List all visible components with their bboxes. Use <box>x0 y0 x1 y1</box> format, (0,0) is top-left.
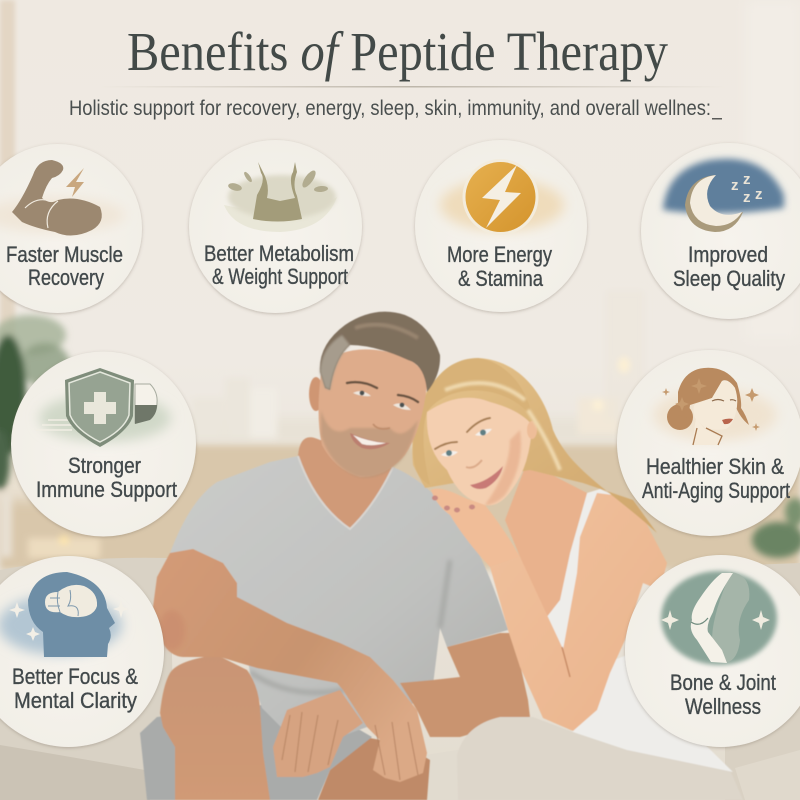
man: hair <box>320 312 440 392</box>
man: features <box>347 382 418 449</box>
man: stubble <box>321 410 418 478</box>
woman: hair highlight <box>445 383 560 470</box>
label: Stronger <box>68 453 141 478</box>
panel: better metabolism <box>189 140 362 313</box>
panel: better focus <box>0 556 164 747</box>
man: far arm <box>400 633 530 737</box>
panel: more energy <box>415 140 587 312</box>
man: shorts <box>140 705 372 800</box>
man: finger lines <box>375 722 418 780</box>
panel: improved sleep: Sleep Quality <box>673 266 785 291</box>
blurred plant left <box>0 315 70 557</box>
icon: flexed arm <box>12 160 102 236</box>
icon: crescent moon: z <box>755 186 762 203</box>
panel: better focus: Mental Clarity <box>14 688 137 713</box>
panel: more energy: & Stamina <box>458 266 544 291</box>
label: Better Focus & <box>12 664 138 689</box>
man: shirt fold shadows <box>250 560 450 693</box>
label: Healthier Skin & <box>646 454 784 479</box>
woman: trousers <box>457 717 743 800</box>
icon: crescent moon: z <box>743 189 750 206</box>
man: bent knee and shin <box>160 655 270 800</box>
label: Better Metabolism <box>204 241 354 266</box>
man: lower-hand finger lines <box>282 712 338 772</box>
woman: hair fringe <box>413 358 532 485</box>
label: Bone & Joint <box>670 670 776 695</box>
woman: hair back <box>412 358 657 533</box>
man: far leg <box>318 738 430 800</box>
woman: arm <box>490 493 667 731</box>
panel: faster muscle recovery <box>0 144 142 313</box>
man: t-shirt <box>170 456 508 735</box>
icon: woman portrait <box>662 368 760 445</box>
man: hair highlight <box>355 325 418 338</box>
panel: healthier skin <box>617 350 800 536</box>
woman: ear <box>527 421 537 439</box>
woman: face <box>427 398 532 505</box>
man: collar edge <box>298 456 393 529</box>
panel: stronger immune support <box>11 352 196 536</box>
label: Faster Muscle <box>6 242 123 267</box>
blurred plant right <box>752 498 800 558</box>
woman: chest and neck <box>505 462 587 618</box>
icon: crescent moon: z <box>743 171 750 188</box>
panel: faster muscle recovery: Recovery <box>28 265 104 290</box>
icon: crescent moon: z <box>731 177 738 194</box>
ellipsis mark <box>712 118 722 120</box>
man: near arm <box>153 549 427 782</box>
woman: fingernails <box>432 496 475 512</box>
icon: head with brain <box>9 572 129 657</box>
icon: knee joint <box>661 572 770 663</box>
panel: stronger immune support: Immune Support <box>36 477 177 502</box>
panel: improved sleep <box>641 143 800 319</box>
icon: crescent moon <box>685 171 762 232</box>
panel: better metabolism: & Weight Support <box>212 264 348 289</box>
man: ear <box>309 377 323 411</box>
subtitle: Holistic support for recovery, energy, sleep, skin, immunity, and overall wellnes: <box>69 97 711 120</box>
woman: cheek shade <box>485 430 521 505</box>
label: Improved <box>688 242 768 267</box>
woman: tank top <box>543 489 733 772</box>
blurred candles on shelf <box>28 290 645 558</box>
man: elbow shade <box>159 610 185 650</box>
panel: bone and joint: Wellness <box>685 694 761 719</box>
sofa <box>0 558 800 800</box>
woman: features <box>435 418 503 489</box>
label: More Energy <box>447 242 552 267</box>
icon: bowl and figure <box>224 162 337 232</box>
man: face <box>318 349 427 477</box>
photo: couple <box>140 312 743 800</box>
man: lower hand <box>273 690 363 777</box>
title: Benefits of Peptide Therapy <box>127 21 668 82</box>
woman: hand <box>431 489 520 567</box>
man: grey hair temple <box>320 335 350 390</box>
panel: bone and joint <box>625 555 800 747</box>
icon: lightning coin <box>462 159 538 235</box>
woman: elbow crease <box>562 647 570 677</box>
man: neck <box>298 437 395 528</box>
icon: shield and capsule <box>36 368 157 447</box>
